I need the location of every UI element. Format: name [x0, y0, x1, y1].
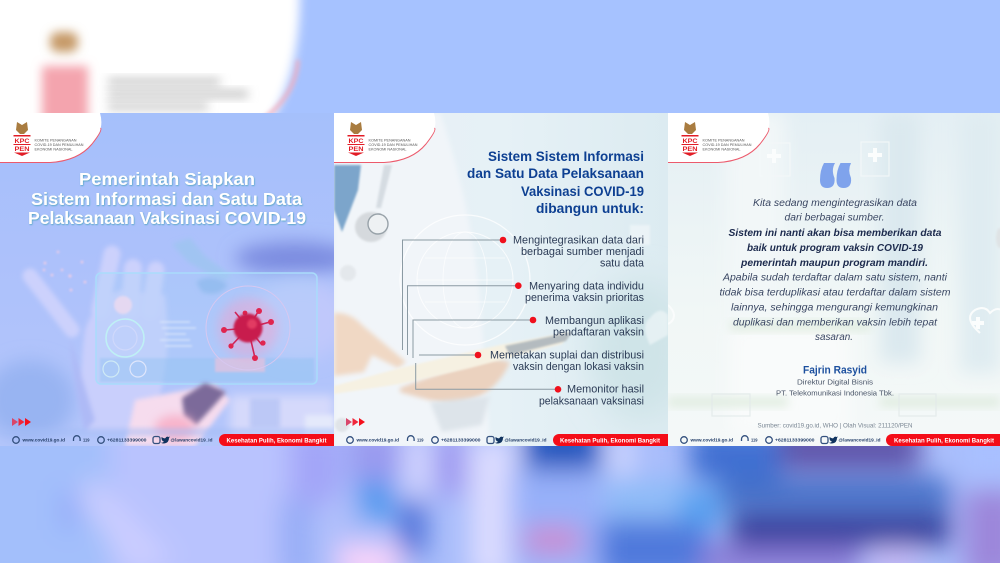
list text: vaksin dengan lokasi vaksin: [513, 361, 644, 373]
logo: KPC PEN: KOMITE PENANGANAN: [368, 138, 411, 142]
heading: Vaksinasi COVID-19: [521, 184, 644, 199]
logo: KPC PEN: PEN: [14, 146, 30, 153]
heading: Sistem Sistem Informasi: [488, 149, 644, 164]
list text: penerima vaksin prioritas: [525, 292, 645, 304]
logo: KPC PEN: EKONOMI NASIONAL: [34, 148, 73, 152]
logo: KPC PEN: [334, 113, 435, 162]
source note: Sumber: covid19.go.id, WHO | Olah Visual: 211120/PEN: [758, 423, 912, 430]
list text: Memetakan suplai dan distribusi: [490, 349, 644, 361]
logo: KPC PEN: PEN: [682, 146, 698, 153]
quote text: lainnya, sehingga mengurangi kemungkinan: [731, 302, 938, 313]
footer: red slogan pill: [886, 434, 1000, 446]
footer: contacts: [13, 436, 213, 444]
logo: KPC PEN: KPC: [682, 138, 698, 145]
logo: KPC PEN: COVID-19 DAN PEMULIHAN: [702, 143, 752, 147]
list text: pendaftaran vaksin: [553, 327, 644, 339]
quote text: Sistem ini nanti akan bisa memberikan data: [728, 228, 942, 239]
logo: KPC PEN: EKONOMI NASIONAL: [702, 148, 741, 152]
footer: contacts: +6281133399000: [775, 438, 815, 444]
callout lines and dots: [402, 237, 561, 393]
icon: red arrows: [346, 418, 365, 426]
footer: contacts: [347, 436, 547, 444]
list text: Menyaring data individu: [529, 280, 644, 292]
quote text: Apabila sudah terdaftar dalam satu sistem, nanti: [722, 273, 948, 284]
title: Pemerintah Siapkan: [79, 169, 255, 189]
quote text: pemerintah maupun program mandiri.: [740, 258, 928, 269]
footer: contacts: [681, 436, 881, 444]
panel: pemerintah siapkan (left): [0, 113, 355, 446]
footer: contacts: www.covid19.go.id: [690, 438, 733, 444]
illustration: gloved hand holding virus hologram: [0, 232, 334, 446]
illustration: doctor holding tablet: [334, 113, 690, 446]
footer: contacts: 119: [751, 438, 758, 444]
logo: KPC PEN: KPC: [348, 138, 364, 145]
footer: red slogan pill: [219, 434, 334, 446]
quote text: sasaran.: [815, 332, 853, 343]
quote text: [720, 198, 950, 343]
footer: contacts: @lawancovid19_id: [170, 438, 213, 444]
footer: contacts: @lawancovid19_id: [504, 438, 547, 444]
heading: [467, 149, 644, 216]
footer: red slogan pill: [553, 434, 668, 446]
blurred background: bottom: [55, 446, 1000, 563]
logo: KPC PEN: [668, 113, 769, 162]
blurred background: top: [0, 0, 306, 113]
icon: quotation mark: [820, 163, 851, 188]
logo: KPC PEN: COVID-19 DAN PEMULIHAN: [368, 143, 418, 147]
logo: KPC PEN: KOMITE PENANGANAN: [702, 138, 745, 142]
attribution: Fajrin Rasyid: [803, 364, 867, 376]
icon: virus: [221, 308, 274, 361]
panel: quote (right): [668, 113, 1000, 446]
list text: Memonitor hasil: [567, 384, 644, 396]
logo: KPC PEN: KOMITE PENANGANAN: [34, 138, 77, 142]
quote text: tidak bisa terduplikasi atau terdaftar dalam sistem: [720, 287, 950, 298]
attribution: [776, 364, 894, 398]
list text: Mengintegrasikan data dari: [513, 234, 644, 246]
icon: red arrows: [12, 418, 31, 426]
footer: contacts: www.covid19.go.id: [22, 438, 65, 444]
quote text: baik untuk program vaksin COVID-19: [747, 243, 924, 254]
title: [28, 169, 306, 228]
heading: dibangun untuk:: [536, 201, 644, 216]
footer: red slogan pill: Kesehatan Pulih, Ekonomi Bangkit: [560, 437, 661, 444]
title: Sistem Informasi dan Satu Data: [31, 189, 302, 209]
footer: contacts: +6281133399000: [441, 438, 481, 444]
list text: [490, 234, 645, 408]
footer: red slogan pill: Kesehatan Pulih, Ekonomi Bangkit: [894, 437, 995, 444]
list text: berbagai sumber menjadi: [521, 246, 644, 258]
attribution: Direktur Digital Bisnis: [797, 379, 874, 386]
title: Pelaksanaan Vaksinasi COVID-19: [28, 208, 306, 228]
footer: red slogan pill: Kesehatan Pulih, Ekonomi Bangkit: [226, 437, 327, 444]
quote text: duplikasi dan memberikan vaksin lebih tepat: [733, 317, 938, 328]
quote text: dari berbagai sumber.: [784, 213, 884, 224]
list text: satu data: [600, 258, 644, 270]
list text: pelaksanaan vaksinasi: [539, 396, 644, 408]
heading: dan Satu Data Pelaksanaan: [467, 166, 644, 181]
panel: sistem informasi dibangun untuk (middle): [334, 113, 690, 446]
footer: contacts: www.covid19.go.id: [356, 438, 399, 444]
logo: KPC PEN: KPC: [14, 138, 30, 145]
footer: contacts: @lawancovid19_id: [838, 438, 881, 444]
logo: KPC PEN: EKONOMI NASIONAL: [368, 148, 407, 152]
logo: KPC PEN: [0, 113, 101, 162]
footer: contacts: +6281133399000: [107, 438, 147, 444]
logo: KPC PEN: PEN: [348, 146, 364, 153]
footer: contacts: 119: [83, 438, 90, 444]
footer: contacts: 119: [417, 438, 424, 444]
logo: KPC PEN: COVID-19 DAN PEMULIHAN: [34, 143, 84, 147]
illustration: hospital background: [668, 113, 1000, 446]
attribution: PT. Telekomunikasi Indonesia Tbk.: [776, 391, 894, 398]
quote text: Kita sedang mengintegrasikan data: [753, 198, 918, 209]
list text: Membangun aplikasi: [545, 315, 644, 327]
